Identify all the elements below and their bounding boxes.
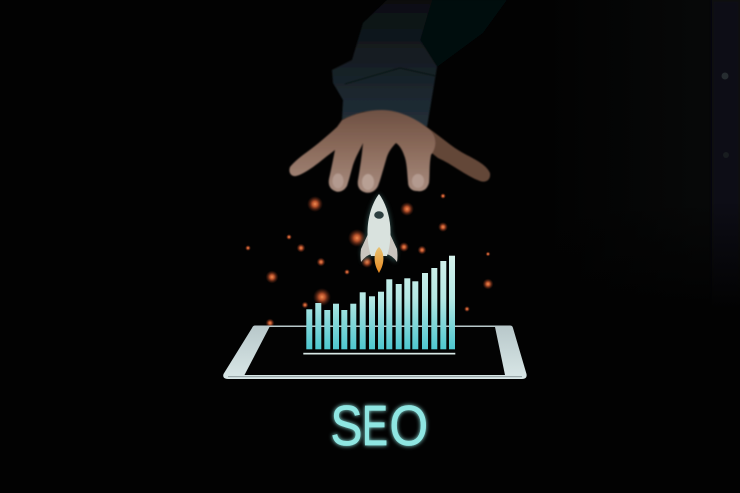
- title: SEO: [330, 394, 428, 458]
- sleeve: [332, 0, 507, 127]
- icon: rocket: [360, 193, 398, 273]
- fingernails: [332, 174, 344, 188]
- shirt torso: [540, 0, 740, 312]
- palm and fingers: [289, 110, 435, 193]
- rocket glow: [360, 193, 398, 263]
- tablet: [223, 326, 527, 379]
- orange particles: [245, 193, 494, 366]
- thumb: [428, 128, 490, 182]
- rocket window: [374, 211, 384, 219]
- tablet frame: [223, 326, 527, 379]
- rocket flame: [375, 247, 383, 273]
- title: SEO: O: [390, 395, 428, 458]
- shirt buttons: [722, 72, 729, 158]
- hand: [289, 110, 490, 193]
- rocket fins: [360, 234, 398, 262]
- tablet lower edge: [228, 376, 522, 377]
- bar chart: [306, 256, 455, 349]
- title: SEO: S: [330, 394, 362, 458]
- title: SEO: E: [362, 395, 388, 458]
- tablet screen: [244, 327, 505, 375]
- rocket body: [368, 194, 390, 256]
- chart baseline: [303, 353, 455, 354]
